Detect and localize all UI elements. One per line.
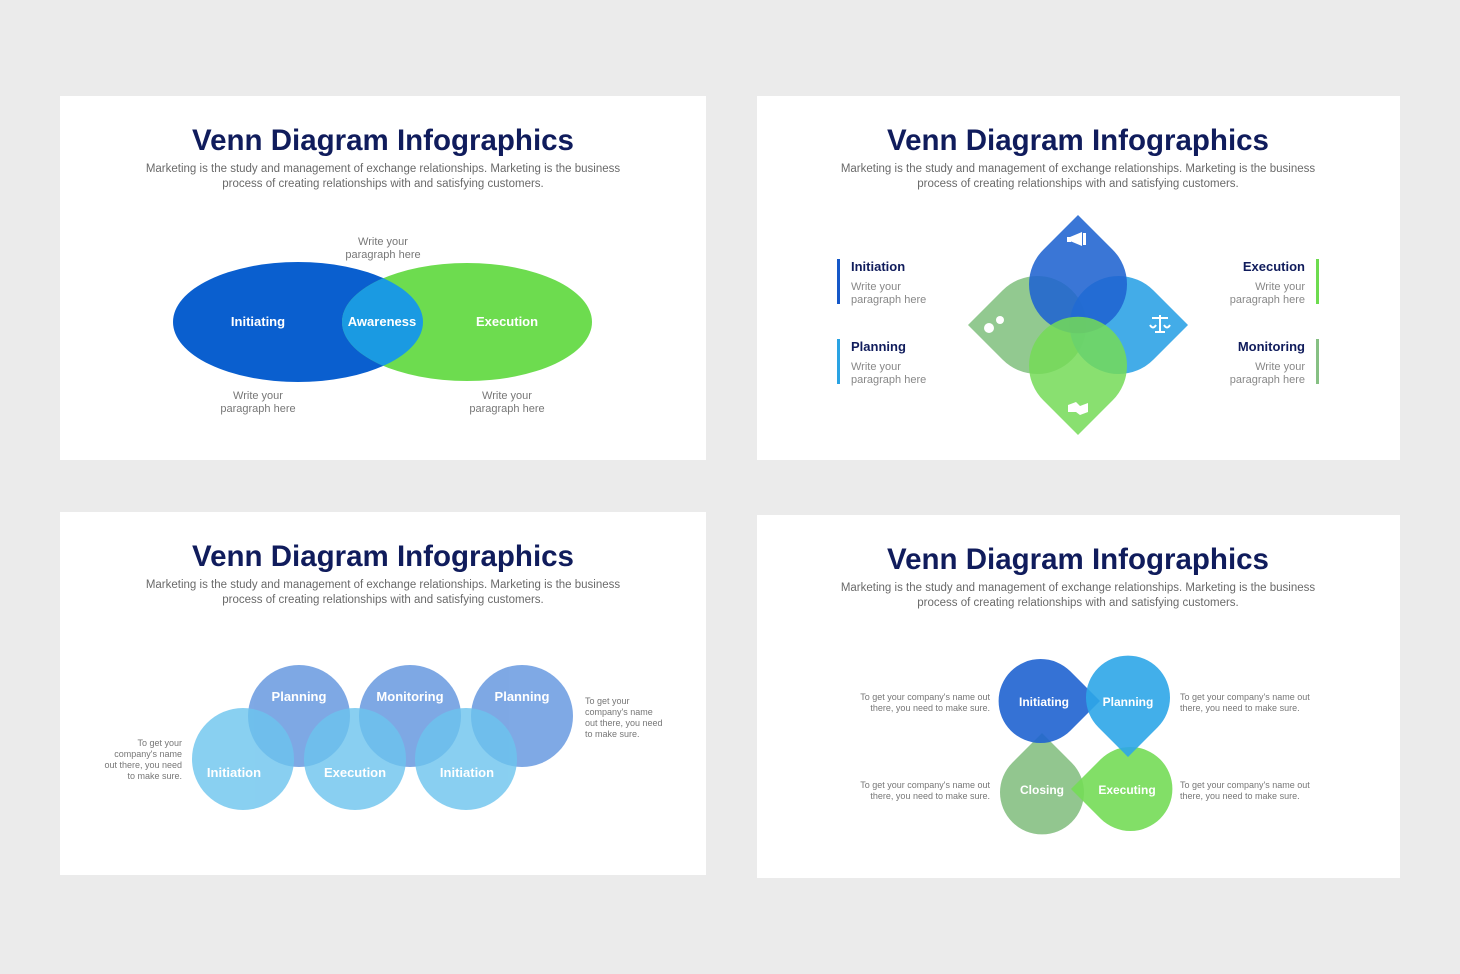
drop labels: Planning	[1103, 695, 1153, 709]
labels: Initiating	[231, 314, 285, 329]
paragraph texts: Write your	[482, 390, 532, 402]
icon: handshake	[1068, 402, 1088, 415]
text: planning: Planning	[851, 339, 906, 354]
paragraph texts: paragraph here	[345, 249, 421, 261]
subtitle: process of creating relationships with and satisfying customers.	[917, 178, 1239, 190]
panel: four drops	[757, 515, 1400, 878]
subtitle: Marketing is the study and management of exchange relationships. Marketing is the business	[146, 163, 620, 175]
text: initiation: Write your	[851, 281, 901, 293]
text: execution: paragraph here	[1230, 294, 1305, 306]
side texts: To get your	[585, 696, 630, 706]
side texts: To get your	[137, 738, 182, 748]
circle labels: Planning	[495, 689, 550, 704]
side texts: there, you need to make sure.	[870, 703, 990, 713]
labels: Awareness	[348, 314, 416, 329]
text: planning	[837, 339, 926, 386]
drop labels: Executing	[1098, 783, 1156, 797]
icon: megaphone	[1067, 232, 1086, 246]
drop: planning	[1086, 656, 1170, 757]
side texts	[104, 696, 663, 781]
text: initiation: paragraph here	[851, 294, 926, 306]
side texts: there, you need to make sure.	[870, 791, 990, 801]
subtitle: Marketing is the study and management of exchange relationships. Marketing is the business	[841, 582, 1315, 594]
text: planning: Write your	[851, 361, 901, 373]
petal: top blue	[1029, 215, 1127, 333]
side texts: out there, you need	[585, 718, 663, 728]
paragraph texts: paragraph here	[220, 403, 296, 415]
title: Venn Diagram Infographics	[192, 124, 574, 157]
panel: four petal venn	[757, 96, 1400, 460]
paragraph texts: paragraph here	[469, 403, 545, 415]
title: Venn Diagram Infographics	[887, 124, 1269, 157]
side texts: out there, you need	[104, 760, 182, 770]
drop labels	[1019, 695, 1156, 797]
circle labels	[207, 689, 550, 780]
ellipse: execution	[342, 263, 592, 381]
circle labels: Execution	[324, 765, 386, 780]
subtitle: process of creating relationships with and satisfying customers.	[222, 594, 544, 606]
text: execution: Write your	[1255, 281, 1305, 293]
ellipse: initiating	[173, 262, 423, 382]
subtitle: process of creating relationships with and satisfying customers.	[917, 597, 1239, 609]
side texts: there, you need to make sure.	[1180, 703, 1300, 713]
text: initiation: Initiation	[851, 259, 905, 274]
panel: six circles	[60, 512, 706, 875]
subtitle: Marketing is the study and management of exchange relationships. Marketing is the business	[841, 163, 1315, 175]
side texts: to make sure.	[127, 771, 182, 781]
text: initiation	[837, 259, 926, 306]
drop labels: Initiating	[1019, 695, 1069, 709]
side texts: there, you need to make sure.	[1180, 791, 1300, 801]
labels: Execution	[476, 314, 538, 329]
text: planning: paragraph here	[851, 374, 926, 386]
side texts: company's name	[114, 749, 182, 759]
side texts: company's name	[585, 707, 653, 717]
side texts	[860, 692, 1310, 801]
drop: closing	[1000, 733, 1084, 834]
circle labels: Monitoring	[376, 689, 444, 704]
title: Venn Diagram Infographics	[887, 543, 1269, 576]
petal: right blue	[1070, 276, 1188, 374]
petal: left green	[968, 276, 1086, 374]
paragraph texts: Write your	[358, 236, 408, 248]
subtitle: Marketing is the study and management of exchange relationships. Marketing is the business	[146, 579, 620, 591]
intersection: awareness	[342, 278, 423, 366]
petal: bottom green	[1029, 317, 1127, 435]
text: monitoring: paragraph here	[1230, 374, 1305, 386]
title: Venn Diagram Infographics	[192, 540, 574, 573]
circles bottom row	[192, 708, 517, 810]
drop: executing	[1071, 747, 1172, 831]
panel: two-ellipse venn	[60, 96, 706, 460]
text: execution	[1230, 259, 1319, 306]
paragraph texts	[220, 236, 545, 415]
circles top row	[248, 665, 573, 767]
side texts: to make sure.	[585, 729, 640, 739]
side texts: To get your company's name out	[1180, 692, 1310, 702]
text: monitoring	[1230, 339, 1319, 386]
side texts: To get your company's name out	[1180, 780, 1310, 790]
drop labels: Closing	[1020, 783, 1064, 797]
drop: initiating	[999, 659, 1100, 743]
circle labels: Initiation	[207, 765, 261, 780]
paragraph texts: Write your	[233, 390, 283, 402]
circle labels: Initiation	[440, 765, 494, 780]
side texts: To get your company's name out	[860, 692, 990, 702]
icon: scales	[1150, 315, 1170, 332]
text: monitoring: Monitoring	[1238, 339, 1305, 354]
text: execution: Execution	[1243, 259, 1305, 274]
subtitle: process of creating relationships with and satisfying customers.	[222, 178, 544, 190]
side texts: To get your company's name out	[860, 780, 990, 790]
circle labels: Planning	[272, 689, 327, 704]
labels	[231, 314, 538, 329]
text: monitoring: Write your	[1255, 361, 1305, 373]
icon: gears	[984, 316, 1004, 333]
